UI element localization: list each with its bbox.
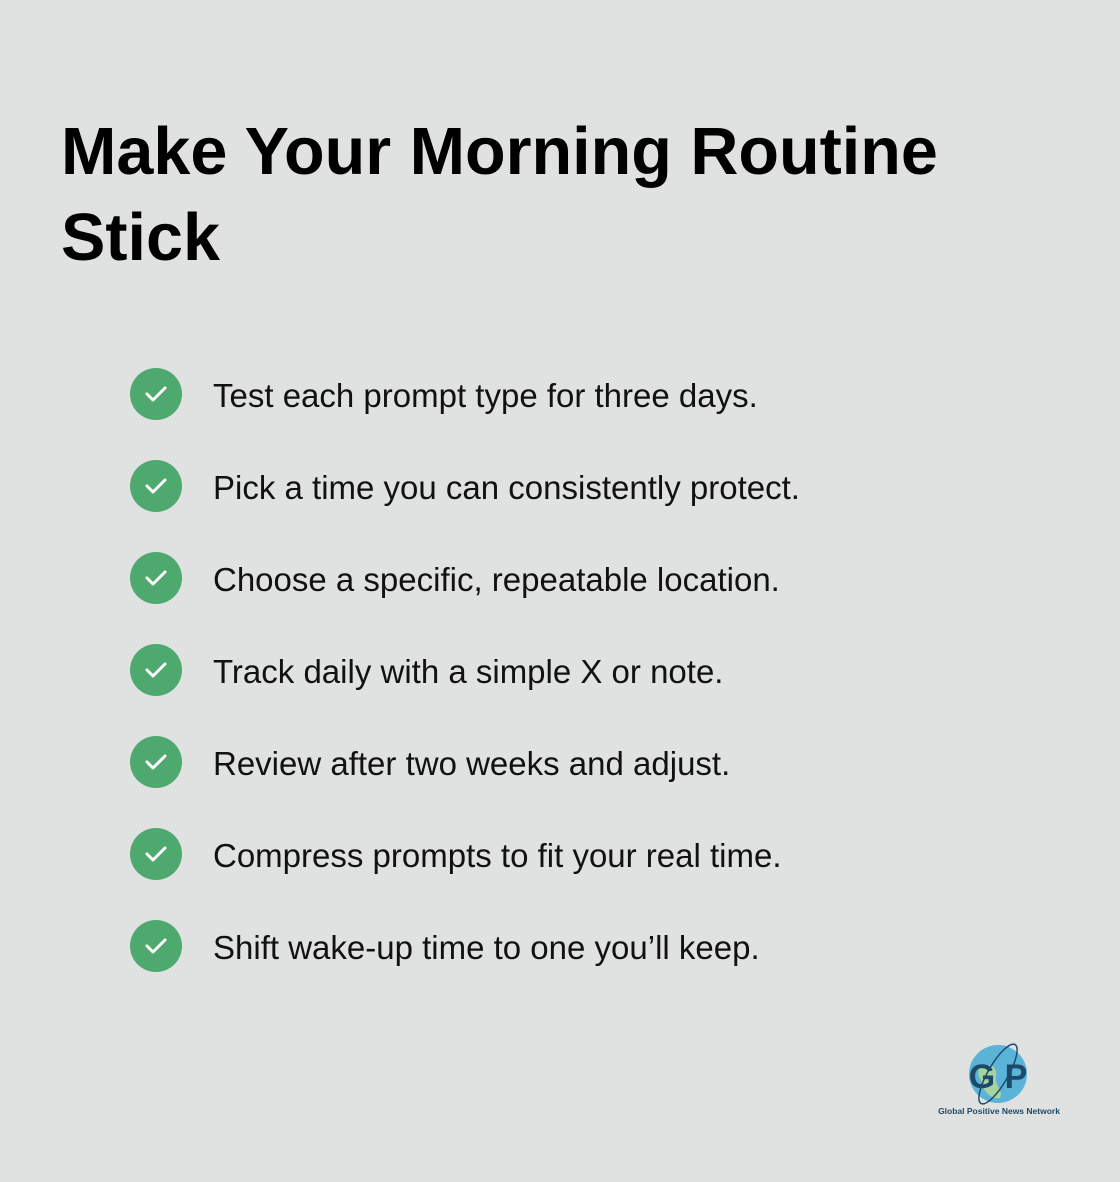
item 3: Choose a specific, repeatable location. [213,561,780,598]
title: Stick [61,201,220,275]
item 3 [130,552,780,604]
item 5: Review after two weeks and adjust. [213,745,730,782]
item 4: Track daily with a simple X or note. [213,653,723,690]
title: Make Your Morning Routine [61,115,938,189]
item 1 [130,368,758,420]
item 6 [130,828,782,880]
item 7: Shift wake-up time to one you’ll keep. [213,929,760,966]
item 2 [130,460,800,512]
item 1: Test each prompt type for three days. [213,377,758,414]
logo: G P [969,1058,1027,1096]
logo [938,1043,1060,1116]
item 4 [130,644,723,696]
title [61,115,938,275]
item 7 [130,920,760,972]
logo: Global Positive News Network [938,1106,1060,1116]
item 5 [130,736,730,788]
item 2: Pick a time you can consistently protect. [213,469,800,506]
item 6: Compress prompts to fit your real time. [213,837,782,874]
